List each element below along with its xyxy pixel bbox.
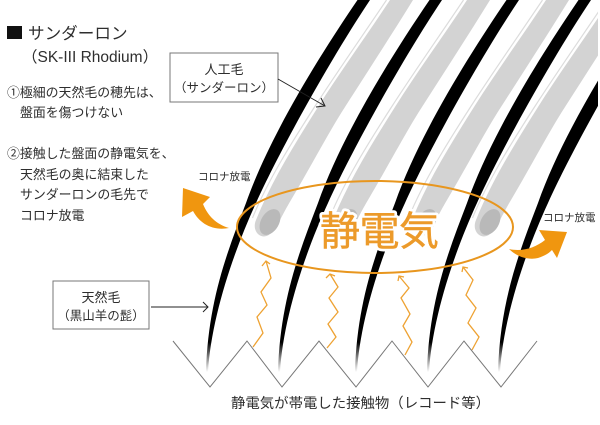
title: （SK-III Rhodium） [22,49,158,66]
label box: natural hair [53,281,149,329]
heading: static electricity: 静電気 [320,210,438,254]
point 2: コロナ放電 [20,208,85,223]
synthetic bristle 4 [472,0,600,239]
arrow: to synthetic hair [278,79,325,107]
label: corona right: コロナ放電 [543,211,596,224]
contact surface zigzag [173,341,537,387]
point 2 [7,146,175,223]
title [7,24,158,66]
label box: natural hair: 天然毛 [81,290,121,305]
label box: synthetic hair [170,53,278,102]
point 2: ②接触した盤面の静電気を、 [7,146,175,161]
label box: synthetic hair: 人工毛 [204,62,244,77]
synthetic bristles and natural hairs [206,0,600,372]
point 2: 天然毛の奥に結束した [20,167,149,182]
synthetic bristle 1 [252,0,413,239]
point 2: サンダーロンの毛先で [20,187,149,202]
point 1: 盤面を傷つけない [20,105,123,120]
arrow: corona discharge right [509,230,567,259]
natural hairs [206,0,600,372]
static ellipse [237,181,513,273]
caption: 静電気が帯電した接触物（レコード等） [231,394,490,412]
synthetic bristle 3 [408,0,569,239]
point 1: ①極細の天然毛の穂先は、 [7,85,162,100]
arrow: corona discharge left [182,188,229,229]
heading: static electricity: 静電気 [320,210,438,254]
label box: natural hair: （黒山羊の髭） [57,308,145,323]
point 1 [7,85,162,120]
synthetic bristle 2 [333,0,490,220]
zigzag arrows [253,261,479,355]
label box: synthetic hair: （サンダーロン） [174,80,274,95]
title: サンダーロン [28,24,128,43]
label: corona left: コロナ放電 [198,170,251,183]
arrow: to natural hair [151,302,208,312]
